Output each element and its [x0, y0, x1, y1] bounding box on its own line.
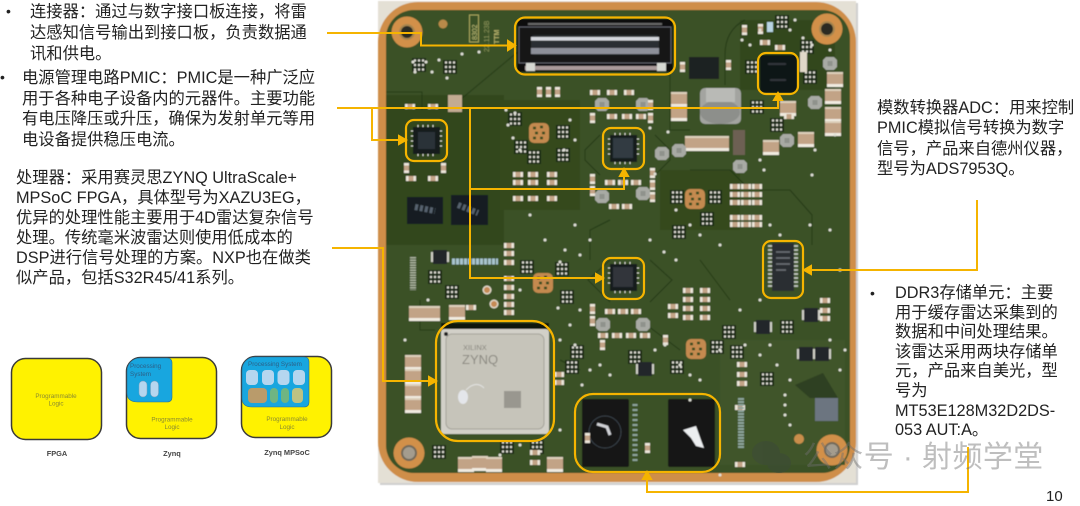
text: PMIC description: 电源管理电路PMIC：PMIC是一种广泛应 — [22, 69, 315, 87]
Zynq block: Processing — [130, 363, 162, 370]
FPGA block: Logic — [48, 400, 64, 408]
text: DDR3 description: 该雷达采用两块存储单 — [895, 343, 1058, 361]
small black chip — [689, 57, 719, 79]
text: DDR3 description: 用于缓存雷达采集到的 — [895, 304, 1058, 322]
Zynq block — [126, 358, 216, 458]
bullet: PMIC: • — [0, 69, 5, 85]
Zynq MPSoC block: Logic — [279, 424, 295, 431]
board traces — [386, 20, 812, 370]
text: processor description: DSP进行信号处理的方案。NXP也在做类 — [16, 249, 311, 267]
text: DDR3 description: 053 AUT:A。 — [895, 421, 988, 439]
text: processor description: 处理器：采用赛灵思ZYNQ UltraScale+ — [16, 169, 297, 187]
text: processor description: 似产品，包括S32R45/41系列。 — [16, 269, 244, 287]
diagram: FPGA Zynq MPSoC comparison — [10, 356, 332, 458]
text: DDR3 description: 元，产品来自美光，型 — [895, 362, 1058, 380]
solder dots — [405, 20, 845, 475]
text: connector description — [30, 2, 307, 63]
text: PMIC description: 有电压降压或升压，确保为发射单元等用 — [22, 110, 315, 128]
text: DDR3 description: 号为 — [895, 382, 928, 400]
board copper edge — [378, 2, 856, 482]
text: PMIC description: 电设备提供稳压电流。 — [22, 131, 185, 149]
dense small pad clusters — [412, 15, 817, 459]
Zynq block: Programmable — [151, 416, 193, 424]
ADC chip — [768, 243, 798, 291]
connector — [517, 19, 673, 72]
small passives — [404, 22, 843, 472]
Zynq block: Logic — [164, 424, 180, 431]
silk screen mark — [470, 15, 501, 52]
Zynq block: System — [130, 371, 151, 378]
Zynq processor: ZYNQ — [462, 352, 498, 367]
text: ADC description — [877, 98, 1074, 178]
text: processor description: 优异的处理性能主要用于4D雷达复杂信号 — [16, 209, 314, 227]
highlight boxes — [406, 18, 803, 472]
arrow: DDR leader — [643, 447, 968, 492]
photo background — [378, 1, 856, 483]
watermark text: 公众号 · 射频学堂 — [803, 441, 1044, 474]
text: ADC description: 型号为ADS7953Q。 — [877, 160, 1024, 178]
Zynq MPSoC block: Zynq MPSoC — [264, 448, 310, 457]
board green surface — [386, 10, 850, 473]
text: DDR3 description — [895, 284, 1058, 439]
text: connector description: 讯和供电。 — [30, 45, 111, 63]
arrow: ADC leader — [804, 200, 977, 274]
WeChat icon watermark — [752, 441, 791, 473]
FPGA block: FPGA — [47, 449, 68, 458]
bullet: connector: • — [6, 3, 11, 19]
Zynq processor: XILINX — [463, 343, 487, 352]
arrow: connector leader — [327, 33, 515, 50]
copper via patches — [529, 123, 706, 359]
text: connector description: 达感知信号输出到接口板，负责数据通 — [30, 24, 307, 42]
silk screen mark: TTM — [494, 29, 501, 44]
black blobs — [407, 195, 488, 225]
text: processor description: 处理。传统毫米波雷达则使用低成本的 — [16, 229, 293, 247]
arrow: PMIC leaders — [337, 93, 782, 282]
text: processor description: MPSoC FPGA，具体型号为XAZU3EG， — [16, 189, 311, 207]
board photo content — [378, 1, 858, 485]
bullet: DDR3: • — [870, 285, 875, 301]
text: ADC description: 模数转换器ADC：用来控制 — [877, 99, 1074, 117]
FPGA block — [12, 358, 102, 458]
silk screen mark: 22.11.23B — [484, 20, 491, 52]
Zynq MPSoC block: Processing System — [248, 361, 302, 368]
mounting holes — [392, 14, 848, 468]
DDR memory chips — [582, 399, 715, 467]
FPGA block: Programmable — [35, 393, 77, 400]
text: DDR3 description: DDR3存储单元：主要 — [895, 284, 1053, 302]
text: DDR3 description: MT53E128M32D2DS- — [895, 402, 1055, 420]
text: ADC description: 信号，产品来自德州仪器， — [877, 140, 1072, 158]
Zynq block: Zynq — [163, 449, 181, 458]
silk screen mark: 8302 — [472, 24, 479, 40]
Zynq processor — [441, 323, 549, 434]
text: ADC description: PMIC模拟信号转换为数字 — [877, 119, 1064, 137]
text: processor description — [16, 168, 314, 287]
text: DDR3 description: 数据和中间处理结果。 — [895, 323, 1058, 341]
text: PMIC description — [22, 68, 315, 149]
Zynq MPSoC block: Programmable — [266, 416, 308, 423]
arrow: processor leader — [332, 248, 436, 385]
page number: 10 — [1046, 488, 1063, 505]
PMIC chips — [411, 125, 639, 293]
inductor — [700, 88, 741, 124]
ADC upper chip — [760, 55, 797, 93]
text: connector description: 连接器：通过与数字接口板连接，将雷 — [30, 3, 307, 21]
Zynq MPSoC block — [242, 356, 332, 457]
text: PMIC description: 用于各种电子设备内的元器件。主要功能 — [22, 90, 315, 108]
